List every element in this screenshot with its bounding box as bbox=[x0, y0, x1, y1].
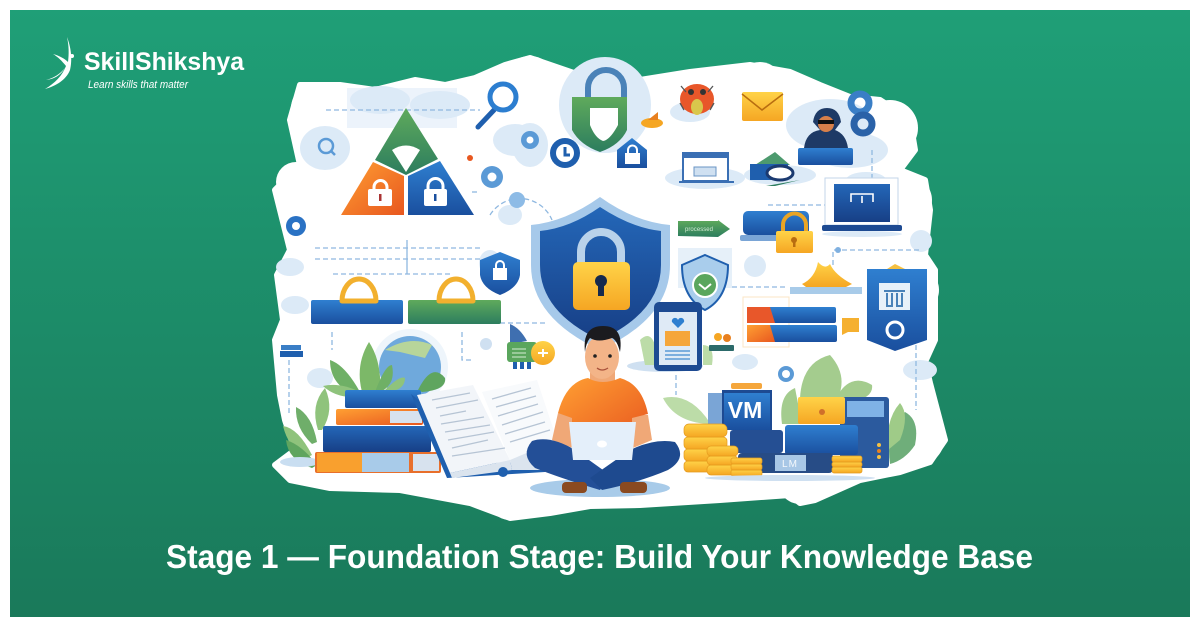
book: orange and pale bbox=[315, 452, 441, 473]
shield outer rim bbox=[531, 197, 670, 350]
VM server bbox=[708, 383, 772, 430]
small device bbox=[730, 430, 783, 453]
icon: yellow flame shape bbox=[790, 262, 862, 294]
LM device bbox=[738, 453, 833, 473]
logo bbox=[45, 37, 245, 91]
small gears bbox=[480, 131, 794, 382]
bar: green bbox=[408, 300, 501, 324]
icon: green card with coin bbox=[507, 324, 555, 369]
icon: clock badge bbox=[550, 138, 580, 168]
icon: envelope bbox=[742, 92, 783, 121]
icon: green arrow tag bbox=[678, 220, 730, 237]
icon: blue badge bbox=[867, 264, 927, 351]
VM label: VM bbox=[728, 397, 762, 423]
shackle left bbox=[342, 279, 376, 301]
icon: hacker at laptop bbox=[798, 108, 853, 165]
icon: large shield with padlock bbox=[531, 197, 670, 350]
blue box bbox=[785, 425, 858, 455]
leaves bbox=[283, 342, 445, 468]
book: top blue bbox=[345, 390, 421, 408]
tower bbox=[840, 397, 889, 468]
segment: orange left bbox=[341, 162, 404, 215]
LM label: LM bbox=[782, 459, 798, 470]
plants and globe at left bbox=[280, 329, 448, 468]
head bbox=[585, 335, 619, 379]
server stack and coins bbox=[684, 383, 889, 481]
icon: browser window bbox=[679, 153, 734, 183]
plants behind server stack bbox=[663, 355, 916, 464]
icon: blue laptop with padlock bbox=[740, 211, 813, 253]
brand name: SkillShikshya bbox=[84, 48, 245, 76]
icon: drone bbox=[641, 112, 663, 128]
book: dark blue bbox=[323, 426, 431, 452]
stack of books bbox=[315, 390, 441, 473]
icon: pin marker bbox=[286, 216, 306, 236]
icon: small server bbox=[280, 345, 303, 357]
icon: orange padlock bbox=[368, 180, 392, 206]
icon: white cone bbox=[392, 146, 420, 172]
padlock shackle bbox=[581, 232, 621, 265]
ground shadow bbox=[705, 475, 875, 481]
white cloud backdrop bbox=[275, 56, 945, 520]
icon: swoosh figure bbox=[45, 37, 74, 89]
icon: green arrow tag: processed bbox=[685, 227, 713, 233]
laptop bbox=[569, 422, 636, 460]
shield face bbox=[540, 207, 661, 340]
segment: blue right bbox=[408, 161, 474, 215]
eyes and mouth bbox=[593, 354, 612, 358]
icon: gears bbox=[851, 94, 872, 133]
orange box bbox=[798, 397, 845, 424]
neck and arms bbox=[552, 370, 652, 450]
icon: small stack with flames bbox=[709, 333, 734, 351]
title: Stage 1 — Foundation Stage: Build Your Knowledge Base bbox=[166, 538, 1033, 575]
icon: orange and blue bars bbox=[743, 297, 859, 347]
padlock body bbox=[573, 262, 630, 310]
triangle: security triad bbox=[341, 108, 474, 215]
coin stacks bbox=[684, 424, 862, 476]
icon: green padlock shield bbox=[572, 70, 627, 152]
icon: tablet bbox=[627, 302, 713, 372]
crossed legs bbox=[527, 439, 610, 490]
hair bbox=[585, 326, 621, 352]
globe bbox=[372, 329, 448, 405]
page text lines bbox=[432, 388, 550, 456]
icon: magnifying glass bbox=[478, 84, 516, 127]
bar: blue bbox=[311, 300, 403, 324]
shoes bbox=[562, 482, 587, 493]
icon: small padlock shield bbox=[480, 252, 520, 295]
book: orange bbox=[336, 409, 423, 425]
icon: pale magnifier in cloud bbox=[319, 139, 335, 155]
icon: dark stack with mask bbox=[750, 152, 800, 186]
shackle right bbox=[439, 279, 473, 301]
open book bbox=[411, 380, 557, 478]
icon: small green shield bbox=[678, 248, 732, 310]
icon: ladybug bbox=[680, 84, 714, 115]
blue and green padlock bars bbox=[311, 279, 501, 324]
pale background clouds and connectors bbox=[276, 57, 937, 415]
icon: blue padlock bbox=[424, 179, 447, 206]
icon: large laptop bbox=[822, 178, 902, 237]
icon: small padlock badge bbox=[617, 138, 647, 168]
person with laptop bbox=[527, 326, 680, 497]
tagline: Learn skills that matter bbox=[88, 79, 189, 91]
floor shadow bbox=[530, 479, 670, 497]
segment: green top bbox=[375, 108, 438, 175]
shirt bbox=[558, 378, 648, 440]
keyhole bbox=[595, 275, 607, 296]
